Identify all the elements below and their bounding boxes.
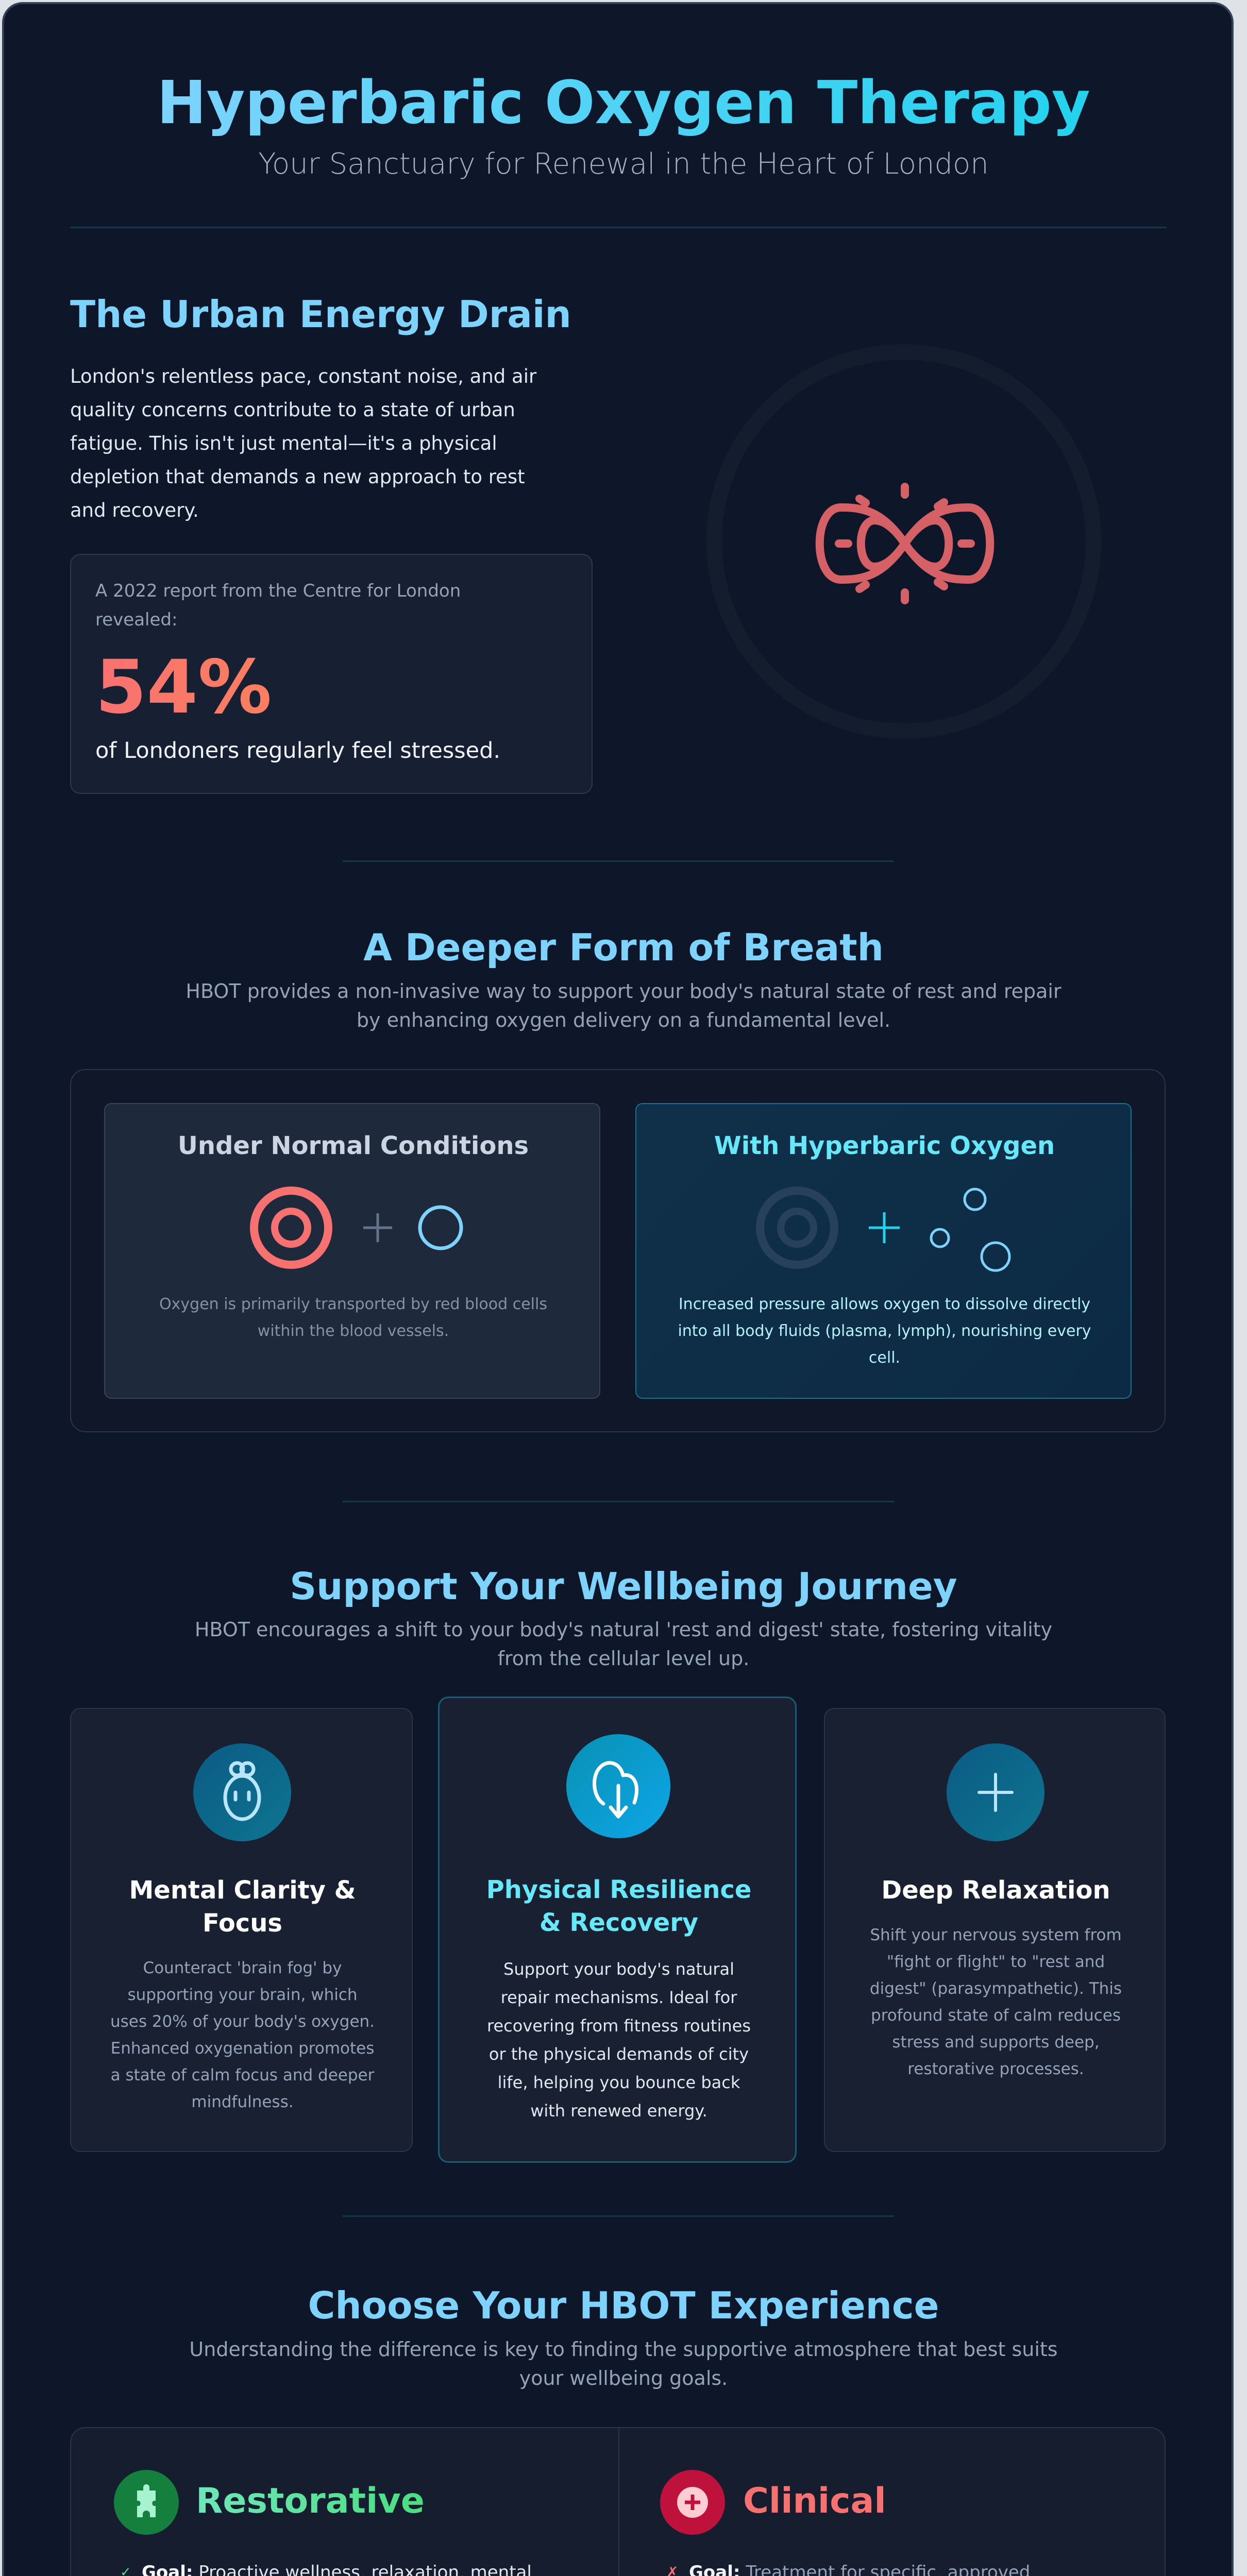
icon: red cell plus oxygen bbox=[250, 1187, 463, 1269]
text: urban paragraph bbox=[70, 365, 537, 521]
stat caption: of Londoners regularly feel stressed. bbox=[95, 738, 500, 764]
card title: Under Normal Conditions bbox=[178, 1131, 529, 1160]
card: deep relaxation bbox=[824, 1708, 1166, 2152]
card text bbox=[159, 1295, 547, 1340]
description: life, helping you bounce back bbox=[498, 2073, 740, 2092]
title: Focus bbox=[203, 1909, 282, 1938]
description: supporting your brain, which bbox=[127, 1986, 358, 2004]
panel: comparison bbox=[70, 1069, 1166, 1432]
text: urban paragraph: London's relentless pace, constant noise, and air bbox=[70, 365, 536, 387]
heading: wellbeing journey: Support Your Wellbeing Journey bbox=[290, 1565, 957, 1608]
stat intro: revealed: bbox=[95, 609, 177, 630]
card: mental clarity bbox=[70, 1708, 413, 2152]
description: a state of calm focus and deeper bbox=[111, 2066, 374, 2084]
heading: urban energy drain: The Urban Energy Drain bbox=[70, 293, 571, 336]
description: profound state of calm reduces bbox=[871, 2006, 1121, 2025]
title: Clinical bbox=[743, 2481, 886, 2521]
column: clinical bbox=[619, 2428, 1166, 2576]
title bbox=[486, 1875, 751, 1937]
heading: choose experience: Choose Your HBOT Experience bbox=[308, 2284, 939, 2327]
title: & Recovery bbox=[540, 1908, 698, 1937]
subtitle: choose bbox=[189, 2338, 1058, 2389]
text: urban paragraph: quality concerns contribute to a state of urban bbox=[70, 399, 515, 421]
icon: puzzle bbox=[114, 2470, 179, 2535]
card text: Oxygen is primarily transported by red blood cells bbox=[159, 1295, 547, 1313]
icon: infinity with glow ring bbox=[815, 483, 995, 604]
title: Physical Resilience bbox=[486, 1875, 751, 1904]
description: with renewed energy. bbox=[530, 2101, 707, 2121]
panel: comparison table bbox=[70, 2427, 1166, 2576]
icon: medical bbox=[660, 2470, 725, 2535]
card text bbox=[678, 1295, 1091, 1367]
card text: cell. bbox=[869, 1349, 900, 1367]
description: Support your body's natural bbox=[503, 1959, 734, 1979]
subtitle: choose: Understanding the difference is key to finding the supportive atmosphere that best suits bbox=[189, 2338, 1058, 2361]
text: urban paragraph: fatigue. This isn't just mental—it's a physical bbox=[70, 432, 497, 454]
subtitle: Your Sanctuary for Renewal in the Heart of London bbox=[258, 147, 989, 181]
card: hyperbaric bbox=[635, 1103, 1132, 1399]
description bbox=[870, 1926, 1122, 2078]
title: Hyperbaric Oxygen Therapy bbox=[157, 69, 1090, 138]
text: urban paragraph: and recovery. bbox=[70, 499, 199, 521]
subtitle: deeper breath: by enhancing oxygen delivery on a fundamental level. bbox=[357, 1009, 890, 1031]
text: urban paragraph: depletion that demands a new approach to rest bbox=[70, 466, 525, 488]
card title: With Hyperbaric Oxygen bbox=[714, 1131, 1055, 1160]
title: Deep Relaxation bbox=[881, 1876, 1110, 1905]
description bbox=[487, 1959, 751, 2121]
subtitle: choose: your wellbeing goals. bbox=[519, 2367, 728, 2389]
description: stress and supports deep, bbox=[892, 2033, 1100, 2052]
subtitle: wellbeing: HBOT encourages a shift to your body's natural 'rest and digest' state, fostering vitality bbox=[195, 1618, 1052, 1641]
icon: plus bbox=[947, 1743, 1044, 1841]
icon: brain bbox=[193, 1743, 291, 1841]
description: Enhanced oxygenation promotes bbox=[111, 2039, 374, 2058]
description: uses 20% of your body's oxygen. bbox=[110, 2012, 375, 2031]
description: Counteract 'brain fog' by bbox=[143, 1959, 342, 1977]
subtitle: deeper breath bbox=[186, 980, 1061, 1031]
card: normal conditions bbox=[104, 1103, 600, 1399]
card text: within the blood vessels. bbox=[258, 1322, 449, 1340]
card: physical resilience bbox=[438, 1697, 797, 2163]
stat intro: A 2022 report from the Centre for London bbox=[95, 581, 461, 601]
stat number: 54% bbox=[95, 644, 272, 730]
subtitle: wellbeing: from the cellular level up. bbox=[498, 1647, 749, 1670]
column: restorative bbox=[114, 2470, 532, 2576]
subtitle: wellbeing bbox=[195, 1618, 1052, 1670]
list: restorative points bbox=[71, 2557, 618, 2558]
subtitle: deeper breath: HBOT provides a non-invasive way to support your body's natural state of rest and repair bbox=[186, 980, 1061, 1003]
list: clinical points bbox=[619, 2557, 1166, 2558]
title bbox=[129, 1876, 356, 1938]
description bbox=[110, 1959, 375, 2111]
description: Shift your nervous system from bbox=[870, 1926, 1122, 1944]
title: Mental Clarity & bbox=[129, 1876, 356, 1905]
card text: Increased pressure allows oxygen to dissolve directly bbox=[679, 1295, 1090, 1313]
description: restorative processes. bbox=[907, 2060, 1084, 2078]
card text: into all body fluids (plasma, lymph), nourishing every bbox=[678, 1322, 1091, 1340]
stat box bbox=[70, 554, 593, 794]
title: Restorative bbox=[196, 2481, 425, 2521]
stat intro bbox=[95, 581, 461, 630]
icon: cloud download bbox=[566, 1734, 670, 1838]
heading: deeper breath: A Deeper Form of Breath bbox=[363, 926, 884, 969]
description: digest" (parasympathetic). This bbox=[870, 1979, 1122, 1998]
description: or the physical demands of city bbox=[489, 2044, 749, 2064]
icon: dissolved oxygen bbox=[756, 1187, 1011, 1272]
description: "fight or flight" to "rest and bbox=[887, 1953, 1105, 1971]
description: recovering from fitness routines bbox=[487, 2016, 751, 2036]
description: repair mechanisms. Ideal for bbox=[501, 1988, 737, 2007]
description: mindfulness. bbox=[191, 2093, 294, 2111]
